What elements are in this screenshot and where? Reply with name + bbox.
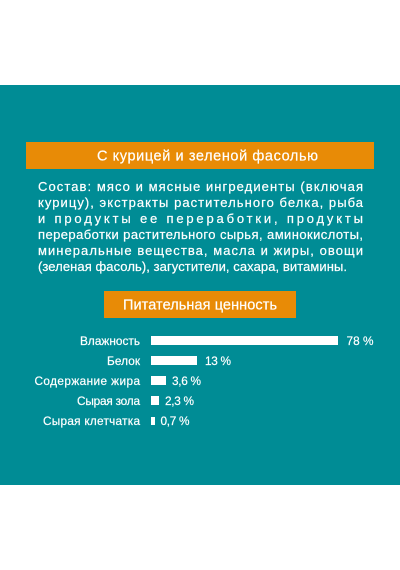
text block: composition: курицу), экстракты растительного белка, рыба: [38, 195, 364, 210]
bar chart: nutritional values: [34, 334, 374, 428]
row: fat: Содержание жира: [34, 374, 140, 388]
heading: nutritional value: Питательная ценность: [123, 298, 277, 314]
row: fat: [34, 374, 202, 388]
heading: product flavour: С курицей и зеленой фасолью: [97, 148, 318, 164]
text block: composition: и продукты ее переработки, продукты: [38, 211, 363, 226]
text block: composition: переработки растительного сырья, аминокислоты,: [38, 227, 363, 242]
row: protein: Белок: [107, 354, 141, 368]
row: moisture: [80, 334, 374, 348]
row: fibre: Сырая клетчатка: [43, 414, 140, 428]
row: fibre: 0,7 %: [160, 414, 190, 428]
row: fibre: [43, 414, 190, 428]
text block: composition: (зеленая фасоль), загустители, сахара, витамины.: [38, 259, 347, 274]
row: protein: [107, 354, 232, 368]
row: ash: 2,3 %: [165, 394, 194, 408]
heading: nutritional value: [104, 291, 296, 318]
text block: composition: минеральные вещества, масла и жиры, овощи: [38, 243, 363, 258]
row: moisture: 78 %: [346, 334, 374, 348]
row: protein: 13 %: [205, 354, 232, 368]
row: fat: 3,6 %: [172, 374, 202, 388]
row: ash: [77, 394, 194, 408]
text block: composition: [38, 179, 364, 274]
heading: product flavour: [26, 142, 374, 169]
text block: composition: Состав: мясо и мясные ингредиенты (включая: [38, 179, 363, 194]
row: moisture: Влажность: [80, 334, 140, 348]
panel: teal background: [0, 85, 400, 485]
row: ash: Сырая зола: [77, 394, 140, 408]
